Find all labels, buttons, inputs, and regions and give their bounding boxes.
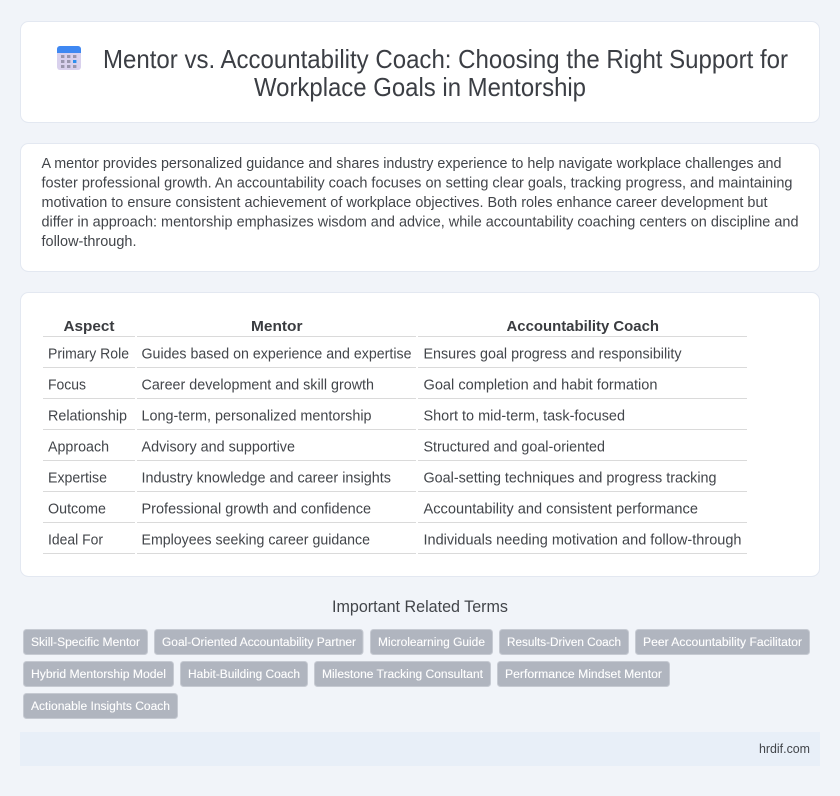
table rules (43, 336, 747, 554)
row: primary role: Guides based on experience and expertise (142, 346, 412, 362)
text block: intro: motivation to ensure consistent achievement of workplace objectives. Both roles enhance career development but (42, 195, 768, 211)
text block: intro: foster professional growth. An accountability coach focuses on setting clear goals, tracking progress, and maintaining (42, 176, 792, 192)
row: relationship (48, 408, 625, 424)
tag (24, 630, 148, 654)
title: Mentor vs. Accountability Coach: Choosing the Right Support for (103, 44, 788, 74)
row: primary role (48, 346, 682, 362)
row: ideal for (48, 532, 742, 548)
footer (20, 732, 820, 766)
tag: Habit-Building Coach (188, 667, 300, 681)
tag: Performance Mindset Mentor (505, 667, 662, 681)
row: focus: Focus (48, 378, 86, 394)
row: primary role: Primary Role (48, 346, 129, 362)
row: approach: Structured and goal-oriented (424, 440, 605, 456)
tag: Milestone Tracking Consultant (322, 667, 484, 681)
heading: related terms: Important Related Terms (332, 598, 508, 616)
row: relationship: Short to mid-term, task-focused (424, 408, 625, 424)
tag (370, 630, 492, 654)
row: focus (48, 378, 658, 394)
tags: related terms (24, 630, 810, 718)
row: ideal for: Ideal For (48, 532, 103, 548)
row: ideal for: Individuals needing motivation and follow-through (424, 532, 742, 548)
row: expertise: Goal-setting techniques and progress tracking (424, 470, 716, 486)
row: outcome: Accountability and consistent performance (424, 502, 698, 518)
row: relationship: Long-term, personalized mentorship (142, 408, 372, 424)
row: focus: Career development and skill growth (142, 378, 374, 394)
tag: Skill-Specific Mentor (31, 635, 140, 649)
title (103, 44, 788, 102)
text block: intro: A mentor provides personalized guidance and shares industry experience to help navigate workplace challenges and (42, 156, 782, 172)
row: expertise: Expertise (48, 470, 107, 486)
row: outcome: Outcome (48, 502, 106, 518)
tag: Peer Accountability Facilitator (643, 635, 802, 649)
text block: intro: differ in approach: mentorship emphasizes wisdom and advice, while accountability coaching centers on discipline and (42, 214, 798, 230)
tag: Goal-Oriented Accountability Partner (162, 635, 356, 649)
table header row: Mentor (251, 319, 303, 335)
text block: intro: follow-through. (42, 234, 136, 250)
tag: Hybrid Mentorship Model (31, 667, 166, 681)
table header row: Accountability Coach (506, 319, 659, 335)
tag: Results-Driven Coach (507, 635, 621, 649)
text block: intro (42, 156, 798, 250)
footer: hrdif.com (759, 741, 810, 756)
panel: intro paragraph (20, 144, 820, 272)
table header row: Aspect (64, 319, 115, 335)
row: approach (48, 440, 605, 456)
panel: comparison table (20, 292, 820, 576)
row: approach: Advisory and supportive (142, 440, 295, 456)
tag (24, 694, 178, 718)
table header row (64, 319, 659, 335)
panel: header card (20, 22, 820, 122)
tag (180, 662, 308, 686)
tag: Actionable Insights Coach (31, 699, 170, 713)
row: outcome: Professional growth and confidence (142, 502, 371, 518)
row: expertise: Industry knowledge and career insights (142, 470, 391, 486)
row: primary role: Ensures goal progress and responsibility (424, 346, 682, 362)
row: expertise (48, 470, 716, 486)
tag (498, 662, 670, 686)
tag (314, 662, 490, 686)
tag (154, 630, 363, 654)
tag (636, 630, 810, 654)
icon: calendar (57, 46, 81, 70)
title: Workplace Goals in Mentorship (254, 72, 586, 102)
row: outcome (48, 502, 698, 518)
row: approach: Approach (48, 440, 109, 456)
row: relationship: Relationship (48, 408, 127, 424)
tag (24, 662, 174, 686)
tag (500, 630, 628, 654)
row: focus: Goal completion and habit formation (424, 378, 658, 394)
tag: Microlearning Guide (378, 635, 485, 649)
row: ideal for: Employees seeking career guidance (142, 532, 370, 548)
